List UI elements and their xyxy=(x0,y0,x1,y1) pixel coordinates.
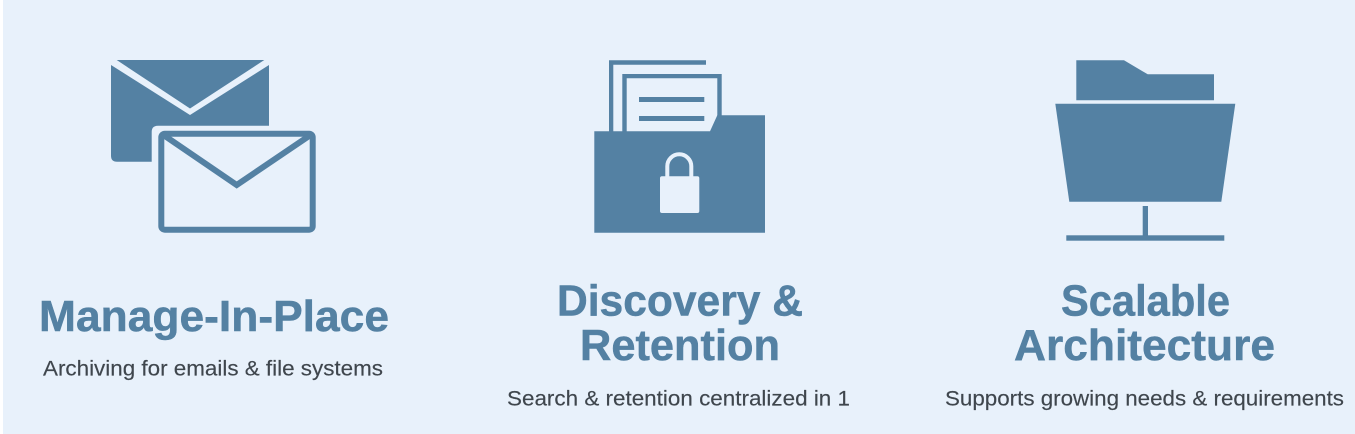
heading: Discovery & Retention xyxy=(557,277,803,370)
icon: locked folder with documents xyxy=(594,60,765,233)
heading: Discovery & Retention: Discovery & xyxy=(557,277,803,326)
text: archiving subtitle: Archiving for emails & file systems xyxy=(43,356,383,380)
heading: Scalable Architecture: Architecture xyxy=(1014,321,1275,370)
heading: Discovery & Retention: Retention xyxy=(580,321,780,370)
heading: Manage-In-Place: Manage-In-Place xyxy=(39,292,389,341)
text: search subtitle: Search & retention centralized in 1 xyxy=(507,386,850,410)
panel: scalable architecture xyxy=(945,60,1344,411)
text: supports subtitle: Supports growing needs & requirements xyxy=(945,386,1344,410)
heading: Scalable Architecture xyxy=(1014,277,1275,370)
heading: Scalable Architecture: Scalable xyxy=(1061,277,1230,326)
panel: manage-in-place xyxy=(39,60,389,380)
icon: network folder xyxy=(1055,60,1235,241)
panel: discovery and retention xyxy=(507,60,850,411)
icon: overlapping envelopes xyxy=(111,60,313,230)
